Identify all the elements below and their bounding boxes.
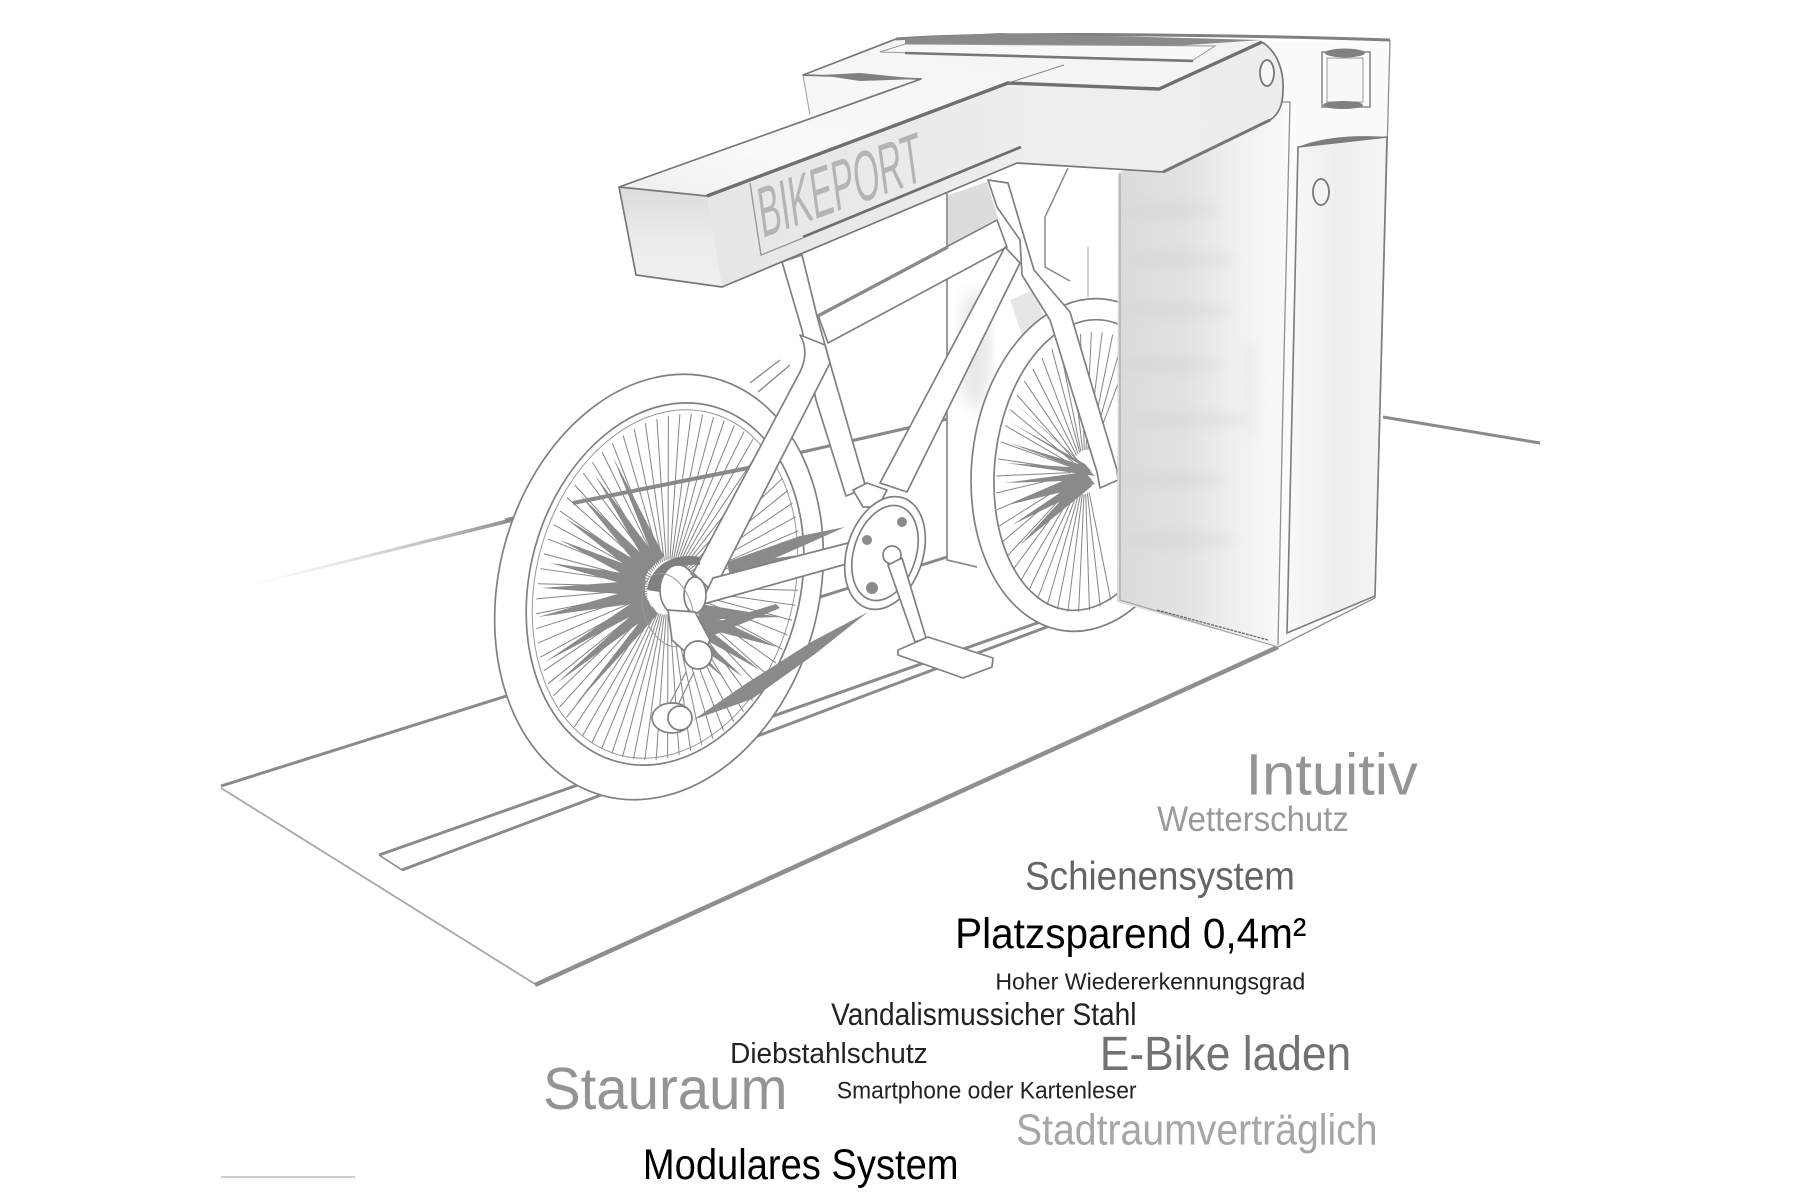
seat stay bbox=[693, 335, 830, 592]
cabinet bbox=[1115, 40, 1390, 647]
dark slit on rear block bbox=[820, 73, 921, 81]
cantilever roof beam bbox=[619, 33, 1390, 287]
word: Stauraum: Stauraum bbox=[543, 1055, 788, 1122]
cabinet edges bbox=[1278, 40, 1390, 647]
rear hub and derailleur bbox=[632, 556, 712, 733]
word: Hoher Wiedererkennungsgrad: Hoher Wiedererkennungsgrad bbox=[995, 969, 1305, 995]
cabinet door bbox=[1287, 137, 1387, 633]
beam end face bbox=[619, 187, 722, 287]
front wheel heavy spokes bbox=[1004, 388, 1095, 545]
cabinet side edges bbox=[1120, 174, 1278, 647]
rear spokes thin bbox=[498, 384, 838, 790]
top strip bbox=[905, 33, 1262, 50]
illustration and word cloud canvas bbox=[220, 33, 1540, 1188]
seat post and seat tube bbox=[782, 255, 866, 496]
cabinet side face bbox=[1117, 102, 1288, 647]
panel seam bbox=[1008, 65, 1064, 83]
floor plate left edge bbox=[221, 788, 535, 984]
rear spokes heavy bbox=[538, 457, 800, 705]
upper and lower chain bbox=[693, 527, 868, 720]
background floor line right of cabinet bbox=[1383, 417, 1540, 443]
pedal bbox=[898, 637, 993, 678]
rail lines bbox=[379, 622, 1060, 870]
rear wheel bbox=[449, 337, 869, 837]
chainring bbox=[831, 483, 939, 620]
BIKEPORT sign bbox=[750, 116, 1021, 255]
word: Smartphone oder Kartenleser: Smartphone oder Kartenleser bbox=[837, 1078, 1137, 1105]
word cloud bbox=[543, 742, 1419, 1188]
word: Intuitiv: Intuitiv bbox=[1246, 742, 1419, 807]
background floor line behind bicycle bbox=[505, 419, 947, 520]
chain stay bbox=[700, 543, 850, 605]
word: Vandalismussicher Stahl: Vandalismussicher Stahl bbox=[831, 996, 1137, 1032]
head tube and fork bbox=[988, 180, 1118, 488]
rail slot bbox=[379, 855, 402, 870]
down tube bbox=[880, 247, 1020, 492]
footnote rule bbox=[221, 1176, 355, 1178]
back pillar bbox=[947, 182, 1120, 600]
beam outlines bbox=[619, 39, 1283, 287]
front wheel bbox=[952, 285, 1218, 645]
crank arm bbox=[888, 558, 926, 642]
door top shadow bbox=[1298, 136, 1387, 147]
word: Platzsparend: Platzsparend 0,4m² bbox=[955, 910, 1306, 957]
pivot bbox=[1260, 60, 1274, 86]
card reader bbox=[1322, 48, 1370, 109]
door lock bbox=[1313, 179, 1329, 205]
word: Schienensystem: Schienensystem bbox=[1025, 854, 1295, 899]
rear tyre and rim bbox=[449, 337, 869, 837]
background floor line fading left bbox=[247, 516, 520, 587]
top edge line bbox=[896, 35, 1390, 40]
sign lettering: BIKEPORT bbox=[753, 116, 927, 253]
floor plate bbox=[221, 557, 1278, 985]
word: Diebstahlschutz: Diebstahlschutz bbox=[730, 1038, 928, 1070]
floor plate near edge bbox=[535, 647, 1278, 985]
brace bbox=[1045, 168, 1070, 281]
beam dark edge bbox=[707, 42, 1262, 196]
pillar smudge bbox=[959, 290, 991, 410]
word: E-Bike laden: E-Bike laden bbox=[1100, 1027, 1351, 1081]
cabinet front face bbox=[1262, 40, 1390, 647]
beam arm front face bbox=[707, 42, 1283, 287]
mudguard bracket bbox=[750, 360, 790, 392]
floor plate far edge bbox=[221, 557, 947, 786]
beam top face bbox=[619, 39, 1262, 196]
background line seen through spokes bbox=[573, 467, 753, 503]
front wheel spokes bbox=[981, 322, 1143, 617]
beam lower stroke bbox=[1163, 120, 1270, 172]
word: Stadtraumverträglich: Stadtraumverträglich bbox=[1016, 1107, 1378, 1155]
side base dashed edge bbox=[1157, 610, 1268, 640]
word: Modulares System: Modulares System bbox=[643, 1141, 959, 1188]
weathered streaks on side face bbox=[1218, 418, 1237, 422]
bicycle frame bbox=[632, 168, 1118, 733]
pillar shaded patch bbox=[948, 182, 998, 245]
top tube bbox=[818, 220, 1007, 343]
word: Wetterschutz: Wetterschutz bbox=[1157, 799, 1349, 839]
inner top panel bbox=[880, 44, 1215, 60]
rear block bbox=[803, 75, 921, 118]
